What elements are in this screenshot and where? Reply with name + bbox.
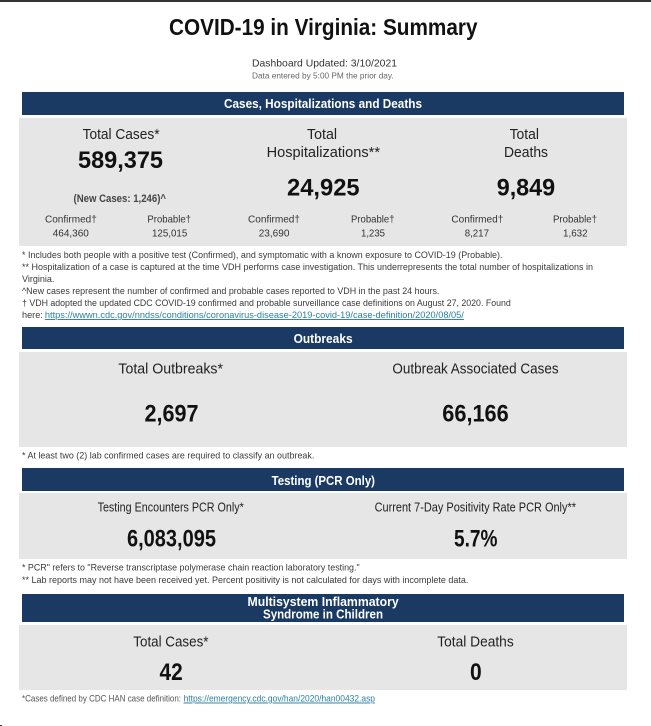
total cases metric: 464,360 xyxy=(53,228,89,240)
title: COVID-19 in Virginia: Summary xyxy=(169,14,478,40)
MIS-C total deaths metric xyxy=(437,634,514,686)
MIS-C total cases metric: 42 xyxy=(160,659,183,686)
panel: cases, hospitalizations and deaths xyxy=(19,118,627,246)
total cases metric: (New Cases: 1,246)^ xyxy=(74,193,166,205)
total outbreaks metric: 2,697 xyxy=(144,400,198,428)
panel: outbreaks xyxy=(19,352,627,447)
outbreak associated cases metric: Outbreak Associated Cases xyxy=(392,362,559,378)
positivity rate metric xyxy=(375,500,576,552)
section header: testing xyxy=(22,468,624,491)
total hospitalizations metric: Confirmed† xyxy=(248,214,300,226)
total deaths metric xyxy=(451,127,597,240)
total hospitalizations metric: Hospitalizations** xyxy=(267,145,380,161)
panel: multisystem inflammatory syndrome in children xyxy=(19,625,627,690)
footnotes: cases section: https://wwwn.cdc.gov/nndss/conditions/coronavirus-disease-2019-covid-19/case-definition/2020/08/05/ xyxy=(45,310,464,321)
total deaths metric: 1,632 xyxy=(563,228,588,240)
positivity rate metric: Current 7-Day Positivity Rate PCR Only** xyxy=(375,500,576,514)
footnote: MIS-C case definition: https://emergency.cdc.gov/han/2020/han00432.asp xyxy=(184,694,375,704)
footnotes: cases section xyxy=(22,250,593,321)
testing encounters metric xyxy=(98,500,244,552)
footnotes: testing: ** Lab reports may not have been received yet. Percent positivity is not calculated for days with incomplete data. xyxy=(22,575,468,586)
total deaths metric: Total xyxy=(510,127,539,143)
total deaths metric: Deaths xyxy=(504,145,548,161)
total cases metric: 589,375 xyxy=(78,147,163,174)
footnotes: cases section: ** Hospitalization of a case is captured at the time VDH performs case investigation. This underrepresents the total number of hospitalizations in xyxy=(22,262,593,273)
testing encounters metric: 6,083,095 xyxy=(127,526,216,552)
section header: testing: Testing (PCR Only) xyxy=(272,473,375,488)
section header: outbreaks: Outbreaks xyxy=(294,331,353,346)
outbreak associated cases metric xyxy=(392,362,559,428)
dashboard update date: Dashboard Updated: 3/10/2021 xyxy=(252,58,397,70)
total cases metric: Total Cases* xyxy=(83,127,160,143)
footnotes: cases section: Virginia. xyxy=(22,274,54,285)
total hospitalizations metric: 24,925 xyxy=(287,174,360,202)
total cases metric: Confirmed† xyxy=(45,214,97,226)
total hospitalizations metric: 23,690 xyxy=(259,228,290,240)
total deaths metric: 9,849 xyxy=(497,174,555,202)
total cases metric: Probable† xyxy=(147,214,191,226)
positivity rate metric: 5.7% xyxy=(454,526,498,552)
total hospitalizations metric: Total xyxy=(307,127,337,143)
MIS-C total cases metric: Total Cases* xyxy=(133,634,209,650)
total cases metric xyxy=(45,127,191,240)
footnotes: cases section: † VDH adopted the updated CDC COVID-19 confirmed and probable surveillance case definitions on August 27, 2020. Found xyxy=(22,298,511,309)
section header: multisystem inflammatory syndrome in children xyxy=(22,594,624,622)
dashboard update date xyxy=(252,58,397,80)
footnotes: cases section: here: xyxy=(22,310,43,321)
footnote: MIS-C case definition: *Cases defined by CDC HAN case definition: xyxy=(22,694,181,704)
total outbreaks metric xyxy=(118,362,223,428)
panel: testing xyxy=(19,493,627,559)
section header: cases, hospitalizations and deaths xyxy=(22,92,624,115)
footnote: outbreaks: * At least two (2) lab confirmed cases are required to classify an outbreak. xyxy=(22,450,314,462)
testing encounters metric: Testing Encounters PCR Only* xyxy=(98,500,244,514)
section header: cases, hospitalizations and deaths: Cases, Hospitalizations and Deaths xyxy=(224,96,422,111)
MIS-C total cases metric xyxy=(133,634,209,686)
section header: multisystem inflammatory syndrome in children: Multisystem Inflammatory xyxy=(248,594,399,609)
total hospitalizations metric: Probable† xyxy=(351,214,395,226)
footnotes: cases section: * Includes both people with a positive test (Confirmed), and symptomatic with a known exposure to COVID-19 (Probable). xyxy=(22,250,502,261)
total cases metric: 125,015 xyxy=(152,228,187,240)
total deaths metric: Confirmed† xyxy=(451,214,503,226)
MIS-C total deaths metric: 0 xyxy=(470,659,482,686)
footnotes: testing xyxy=(22,562,468,586)
total outbreaks metric: Total Outbreaks* xyxy=(118,362,223,378)
footnotes: cases section: ^New cases represent the number of confirmed and probable cases reported to VDH in the past 24 hours. xyxy=(22,286,439,297)
total hospitalizations metric: 1,235 xyxy=(361,228,385,240)
total deaths metric: 8,217 xyxy=(465,228,489,240)
footnotes: testing: * PCR" refers to "Reverse transcriptase polymerase chain reaction laboratory testing." xyxy=(22,562,360,574)
total deaths metric: Probable† xyxy=(553,214,597,226)
MIS-C total deaths metric: Total Deaths xyxy=(437,634,514,650)
dashboard update date: Data entered by 5:00 PM the prior day. xyxy=(252,70,394,80)
total hospitalizations metric xyxy=(248,127,395,240)
outbreak associated cases metric: 66,166 xyxy=(442,400,509,428)
footnote: MIS-C case definition xyxy=(22,694,375,704)
section header: multisystem inflammatory syndrome in children: Syndrome in Children xyxy=(263,606,383,622)
section header: outbreaks xyxy=(22,327,624,349)
